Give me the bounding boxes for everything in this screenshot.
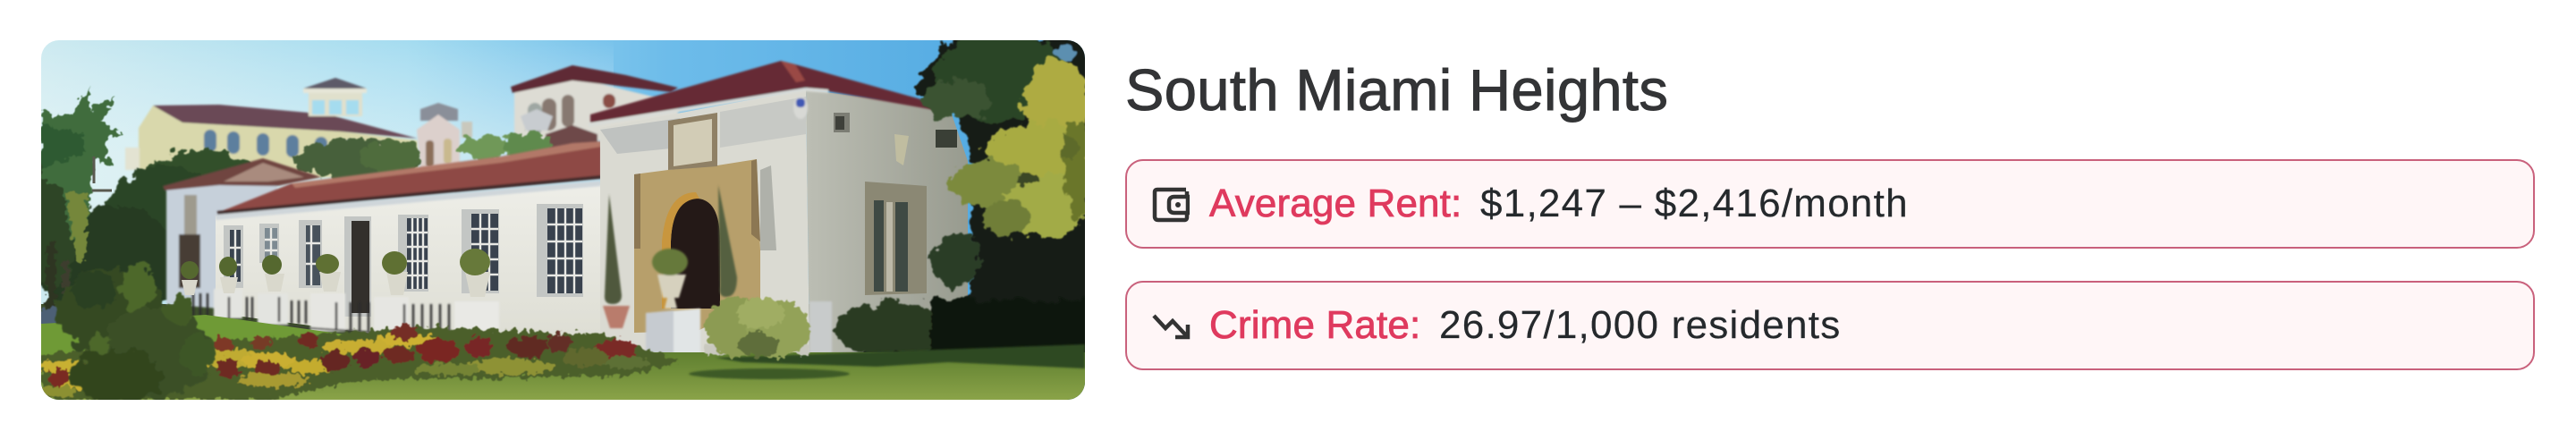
- panel: average rent: [1125, 159, 2535, 249]
- entry building front wall: [600, 89, 809, 355]
- dark shrubs: [835, 300, 1094, 356]
- utility pole: [92, 157, 112, 190]
- green hedge by entry: [706, 296, 810, 358]
- pedestals and railing: [191, 288, 499, 334]
- rent value: $1,247 – $2,416/month: [1480, 182, 1909, 225]
- icon: wallet: [1152, 188, 1190, 222]
- pink chimney tower: [417, 103, 472, 172]
- entry building side wall: [806, 89, 968, 355]
- icon: trending down: [1152, 315, 1190, 340]
- main wing wall: [216, 184, 600, 336]
- lawn: [41, 315, 1085, 400]
- right tree yellow foliage: [930, 58, 1097, 286]
- crime label: Crime Rate:: [1209, 303, 1420, 347]
- main wing roof: [216, 141, 601, 217]
- entry urn and pedestal: [603, 249, 700, 367]
- urns and topiary: [181, 249, 490, 297]
- background trees: [41, 129, 554, 304]
- heading: South Miami Heights: [1125, 57, 1668, 123]
- foreground bush: [58, 265, 215, 402]
- rent label: Average Rent:: [1209, 182, 1462, 225]
- right tree dark foliage: [862, 40, 1085, 352]
- main wing windows: [224, 204, 583, 317]
- left gable wing: [163, 158, 321, 309]
- background tower right: [511, 65, 678, 152]
- palm tree: [41, 86, 123, 324]
- background building with cupola: [125, 78, 418, 183]
- entry roof: [589, 61, 950, 125]
- cypress trees: [605, 185, 737, 304]
- crime value: 26.97/1,000 residents: [1439, 303, 1841, 347]
- sky: [41, 40, 1085, 400]
- photo: South Miami Heights building: [41, 40, 1085, 400]
- panel: crime rate: [1125, 281, 2535, 370]
- column and dark hedge: [809, 301, 832, 355]
- entry arch surround and crest: [634, 113, 760, 333]
- flower bed: [39, 325, 680, 400]
